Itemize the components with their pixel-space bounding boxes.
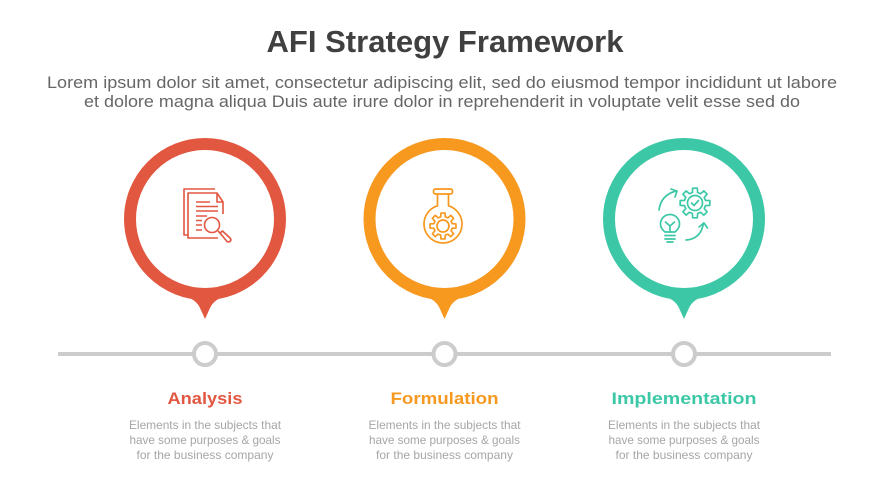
title: AFI Strategy Framework	[266, 24, 624, 59]
label: analysis: Analysis	[168, 389, 242, 408]
timeline node: implementation	[673, 343, 695, 365]
timeline node: analysis	[194, 343, 216, 365]
description: analysis: Elements in the subjects that	[129, 418, 282, 432]
label: formulation: Formulation	[390, 389, 498, 408]
description: analysis	[129, 418, 282, 462]
timeline node: formulation	[434, 343, 456, 365]
pin: implementation	[609, 144, 759, 319]
timeline line	[58, 352, 831, 356]
pin: formulation	[370, 144, 520, 319]
panel: formulation	[368, 144, 521, 462]
description: formulation: Elements in the subjects that	[368, 418, 521, 432]
description: formulation: for the business company	[376, 448, 513, 462]
description: analysis: have some purposes & goals	[130, 433, 280, 447]
description: implementation: have some purposes & goals	[608, 433, 760, 447]
description: analysis: for the business company	[136, 448, 274, 462]
subtitle text: Lorem ipsum dolor sit amet, consectetur adipiscing elit, sed do eiusmod tempor incididunt ut labore	[47, 73, 837, 92]
panel: implementation	[608, 144, 761, 462]
pin: analysis	[130, 144, 280, 319]
label: implementation: Implementation	[612, 389, 756, 408]
panel: analysis	[129, 144, 282, 462]
description: implementation: for the business company	[616, 448, 752, 462]
description: implementation: Elements in the subjects that	[608, 418, 761, 432]
icon: gear, bulb and cycle arrows	[659, 188, 710, 242]
icon: flask with gear	[424, 189, 462, 243]
subtitle text	[47, 73, 837, 111]
description: formulation: have some purposes & goals	[369, 433, 520, 447]
description: implementation	[608, 418, 761, 462]
subtitle text: et dolore magna aliqua Duis aute irure dolor in reprehenderit in voluptate velit esse sed do	[84, 92, 800, 111]
icon: document with magnifier	[184, 189, 231, 242]
description: formulation	[368, 418, 521, 462]
